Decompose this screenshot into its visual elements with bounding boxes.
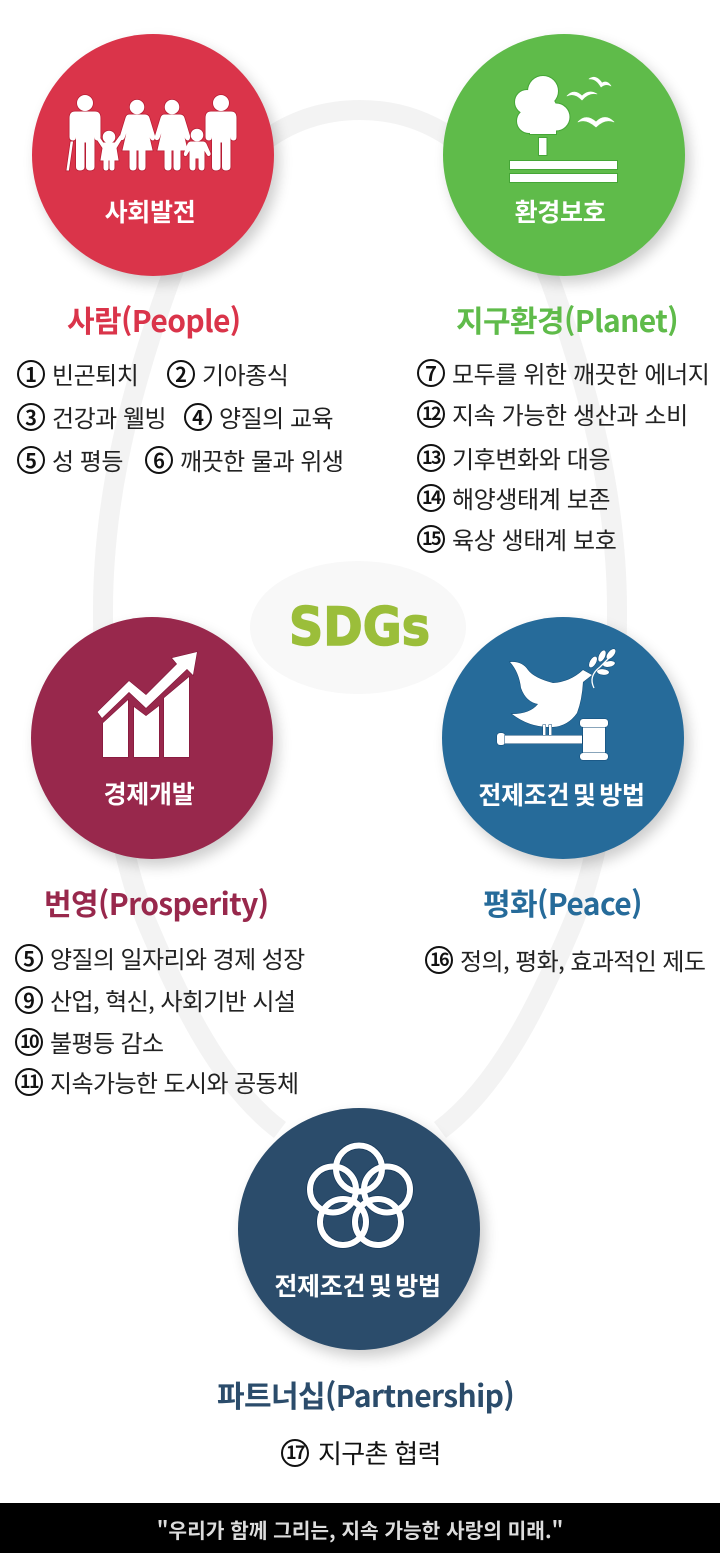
circle: peace xyxy=(442,617,684,859)
goal 6: 6 xyxy=(153,445,165,474)
label: 사회발전 xyxy=(105,193,195,229)
goal 16: 16 xyxy=(430,946,448,972)
goal 12: 지속 가능한 생산과 소비 xyxy=(452,396,688,431)
label: 경제개발 xyxy=(104,775,194,811)
goal 5: 5 xyxy=(23,943,35,972)
goal 16: 정의, 평화, 효과적인 제도 xyxy=(460,942,705,977)
goal 13: 13 xyxy=(422,444,440,470)
panel: partnership xyxy=(217,1372,514,1471)
goal 13: 기후변화와 대응 xyxy=(452,440,610,475)
goal 1: 빈곤퇴치 xyxy=(52,356,138,391)
label: 전제조건 및 방법 xyxy=(478,776,645,812)
panel: people xyxy=(17,297,344,477)
goal 4: 4 xyxy=(192,402,204,431)
goal 17: 지구촌 협력 xyxy=(318,1434,441,1471)
goal 14: 해양생태계 보존 xyxy=(452,480,610,515)
heading: 평화(Peace) xyxy=(483,880,642,924)
goal 2: 기아종식 xyxy=(202,356,288,391)
footer slogan bar xyxy=(0,1503,720,1553)
icon: dove and gavel xyxy=(496,648,616,760)
goal 4: 양질의 교육 xyxy=(219,399,333,434)
panel: planet xyxy=(417,297,709,556)
center SDGs badge: SDGs xyxy=(289,597,430,658)
goal 11: 지속가능한 도시와 공동체 xyxy=(50,1064,299,1099)
heading: 지구환경(Planet) xyxy=(456,297,678,341)
goal 3: 3 xyxy=(25,402,37,431)
footer slogan bar: "우리가 함께 그리는, 지속 가능한 사랑의 미래." xyxy=(157,1514,563,1544)
goal 5 xyxy=(17,442,123,477)
goal 1: 1 xyxy=(25,359,37,388)
goal 11: 11 xyxy=(20,1068,38,1094)
circle: people xyxy=(32,34,274,276)
goal 3: 건강과 웰빙 xyxy=(52,399,166,434)
goal 5: 5 xyxy=(25,445,37,474)
icon: five rings xyxy=(306,1142,414,1249)
panel: peace xyxy=(425,880,705,977)
goal 6: 깨끗한 물과 위생 xyxy=(180,442,344,477)
goal 5: 성 평등 xyxy=(52,442,123,477)
goal 17: 17 xyxy=(286,1439,304,1465)
goal 15: 15 xyxy=(422,525,440,551)
goal 5: 양질의 일자리와 경제 성장 xyxy=(50,940,305,975)
circle: planet xyxy=(443,34,685,276)
icon: tree and birds xyxy=(509,75,618,183)
icon: growth chart xyxy=(97,652,198,758)
goal 7: 모두를 위한 깨끗한 에너지 xyxy=(452,355,709,390)
label: 전제조건 및 방법 xyxy=(274,1267,441,1303)
label: 환경보호 xyxy=(515,193,605,229)
goal 15: 육상 생태계 보호 xyxy=(452,521,616,556)
goal 10: 불평등 감소 xyxy=(50,1024,164,1059)
circle: prosperity xyxy=(31,617,273,859)
goal 14: 14 xyxy=(422,484,440,510)
goal 12: 12 xyxy=(422,400,440,426)
goal 10: 10 xyxy=(20,1028,38,1054)
icon: family xyxy=(66,94,238,172)
heading: 번영(Prosperity) xyxy=(44,880,268,924)
goal 9: 산업, 혁신, 사회기반 시설 xyxy=(50,982,295,1017)
goal 9: 9 xyxy=(23,985,35,1014)
heading: 사람(People) xyxy=(67,297,241,341)
circle: partnership xyxy=(238,1108,480,1350)
heading: 파트너십(Partnership) xyxy=(217,1372,514,1416)
center SDGs badge xyxy=(250,561,466,694)
panel: prosperity xyxy=(15,880,305,1099)
goal 2: 2 xyxy=(175,359,187,388)
goal 7: 7 xyxy=(425,358,437,387)
